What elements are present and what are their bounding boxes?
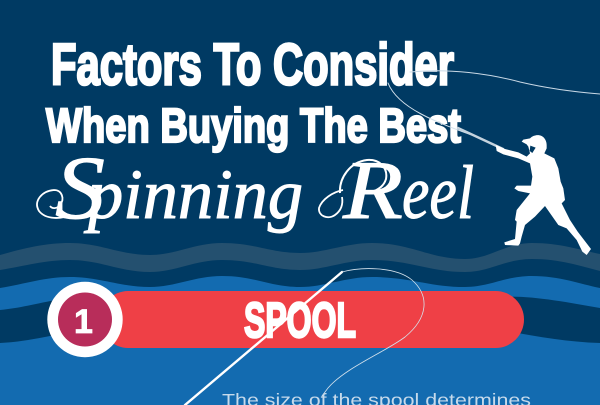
badge: number 1: 1 [74, 303, 93, 341]
icon: angler silhouette [496, 135, 591, 255]
badge: number 1 [47, 282, 123, 357]
fishing line and rod from angler [388, 71, 600, 149]
title line 1: Factors To Consider [51, 32, 454, 98]
title line 3: script: eel [402, 151, 474, 235]
wave: dark band right [500, 297, 600, 343]
title line 2: When Buying The Best [46, 100, 461, 153]
wave: blue water [0, 276, 600, 405]
section bar [100, 291, 524, 348]
title line 3: script [37, 139, 474, 238]
wave: pale band [0, 243, 600, 272]
title line 3: script: pinning [83, 156, 303, 234]
title line 3: script: R [342, 144, 403, 237]
section heading: SPOOL [244, 293, 356, 348]
wave: dark band left [0, 299, 60, 343]
title line 3: script: S [55, 139, 105, 238]
fishing line across section [185, 269, 424, 405]
